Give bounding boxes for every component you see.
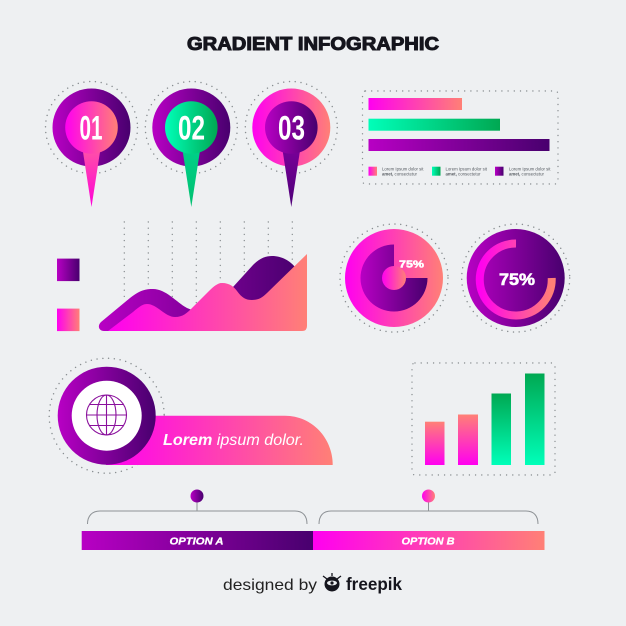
panel: horizontal bar chart	[362, 91, 558, 184]
option B bar	[313, 531, 544, 550]
pin 01	[46, 82, 138, 207]
legend squares	[57, 259, 80, 331]
donut gauge 75%: 75%	[399, 258, 425, 270]
option A bar	[82, 531, 313, 550]
option B bracket and marker	[319, 490, 538, 524]
icon: globe	[86, 395, 126, 435]
bar 3	[492, 394, 511, 465]
back area	[99, 256, 300, 331]
legend: amet, consectetur	[382, 172, 418, 176]
legend: amet, consectetur	[446, 172, 481, 176]
footer credit	[223, 573, 402, 594]
pin 03: 03	[278, 110, 305, 148]
pin 01: 01	[80, 110, 102, 148]
option B bar: OPTION B	[402, 536, 455, 548]
bar: pink	[368, 98, 462, 110]
ring	[58, 367, 156, 465]
bar: purple	[368, 139, 550, 151]
ribbon	[106, 416, 333, 465]
legend	[368, 166, 551, 176]
option A bracket and marker	[88, 490, 307, 524]
panel: vertical bar chart	[412, 363, 555, 475]
donut gauge 75%	[340, 224, 448, 332]
bar: green	[368, 119, 500, 131]
legend: amet, consectetur	[509, 172, 545, 176]
pin 02: 02	[178, 110, 205, 148]
legend: Lorem Ipsum dolor sit	[446, 166, 488, 172]
title: GRADIENT INFOGRAPHIC	[187, 34, 439, 54]
ring gauge 75%: 75%	[499, 271, 535, 289]
area chart	[99, 222, 307, 331]
ring gauge 75%	[462, 224, 570, 332]
option A bar: OPTION A	[170, 536, 224, 548]
legend: Lorem Ipsum dolor sit	[382, 166, 424, 172]
legend: Lorem Ipsum dolor sit	[509, 166, 551, 172]
pin 02	[145, 82, 237, 207]
bar 1	[425, 422, 444, 465]
banner with globe	[49, 358, 333, 473]
ribbon text: Lorem ipsum dolor.	[163, 432, 304, 449]
front area	[108, 254, 307, 331]
pin 03	[245, 82, 337, 207]
bar 2	[458, 414, 478, 465]
icon: freepik mascot	[323, 573, 341, 592]
footer credit: freepik	[346, 574, 402, 594]
footer credit: designed by	[223, 577, 317, 594]
bar 4	[525, 374, 544, 465]
